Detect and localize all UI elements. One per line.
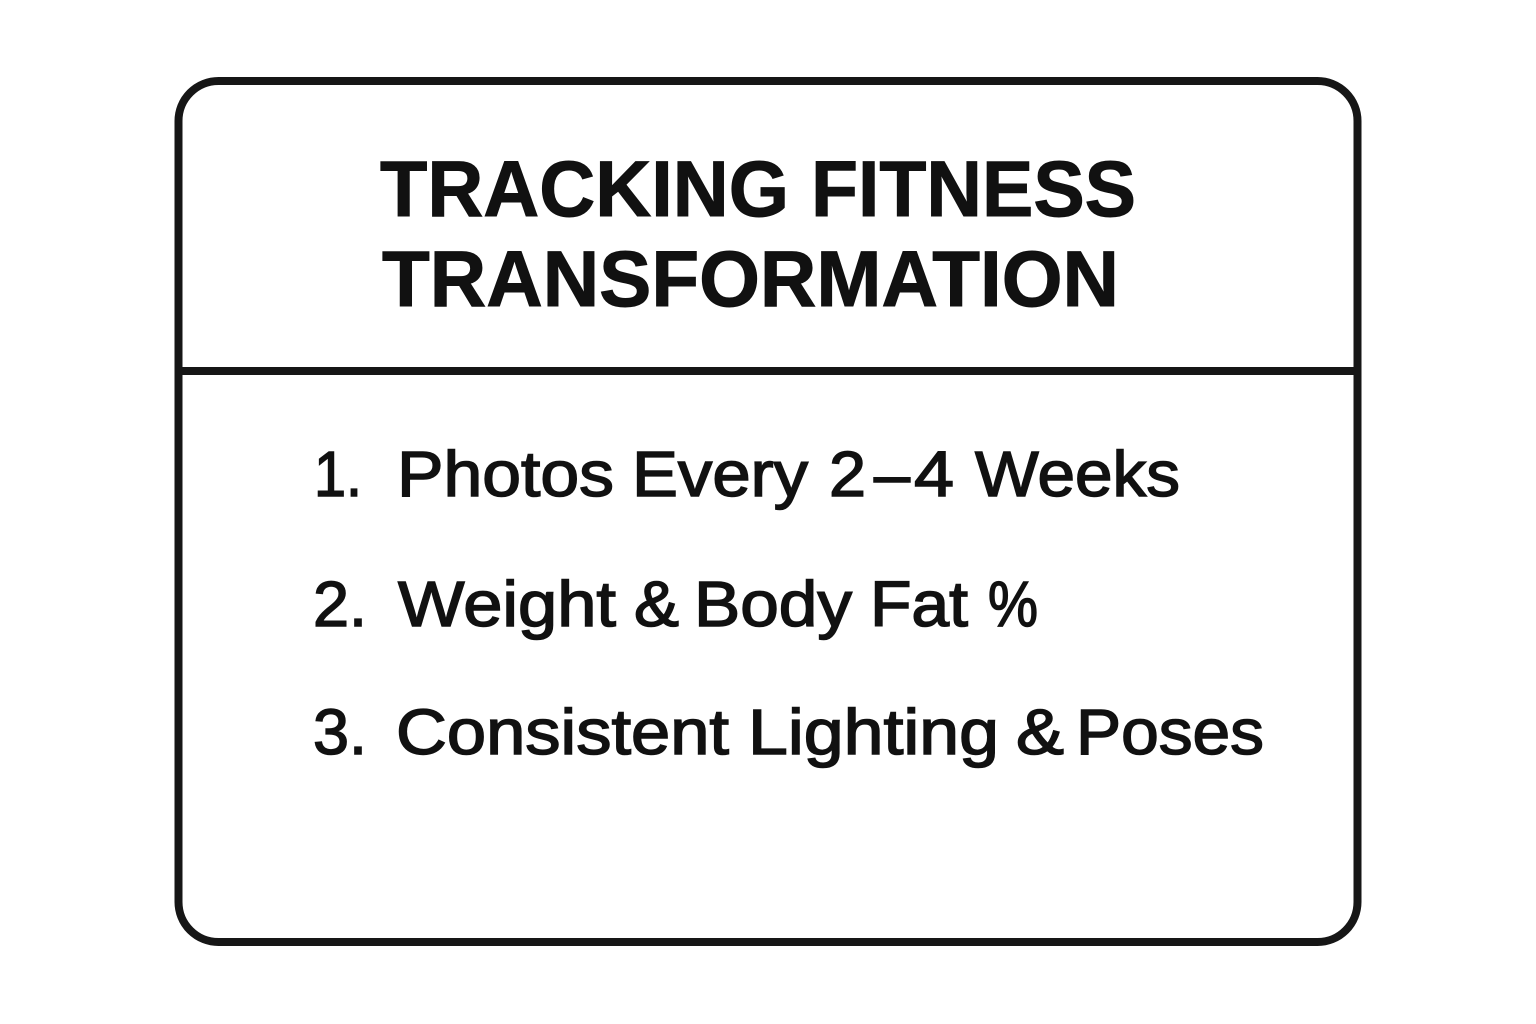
list item 3 bbox=[313, 696, 1264, 768]
list item 2: Fat bbox=[870, 568, 968, 640]
list item 2: Weight bbox=[398, 568, 616, 640]
title: TRANSFORMATION bbox=[382, 234, 1119, 323]
list item 2: % bbox=[988, 568, 1038, 640]
list item 1: 1. bbox=[314, 438, 362, 510]
list item 3: & bbox=[1016, 696, 1064, 768]
list item 1: 4 bbox=[914, 438, 954, 510]
list item 2: Body bbox=[694, 568, 852, 640]
list item 2: 2. bbox=[313, 568, 367, 640]
list item 1: Weeks bbox=[975, 438, 1180, 510]
list item 3: Lighting bbox=[748, 696, 999, 768]
list item 1: – bbox=[874, 438, 910, 510]
title: FITNESS bbox=[811, 144, 1136, 233]
list item 3: Poses bbox=[1076, 696, 1264, 768]
list item 2: & bbox=[634, 568, 679, 640]
list item 1: Photos bbox=[397, 438, 614, 510]
list item 3: Consistent bbox=[396, 696, 729, 768]
list item 3: 3. bbox=[313, 696, 367, 768]
title: TRACKING bbox=[380, 144, 789, 233]
list item 1: 2 bbox=[829, 438, 866, 510]
panel: card outline bbox=[178, 81, 1358, 942]
list item 2 bbox=[313, 568, 1038, 640]
list item 1: Every bbox=[632, 438, 808, 510]
list item 1 bbox=[314, 438, 1180, 510]
title bbox=[380, 144, 1136, 323]
